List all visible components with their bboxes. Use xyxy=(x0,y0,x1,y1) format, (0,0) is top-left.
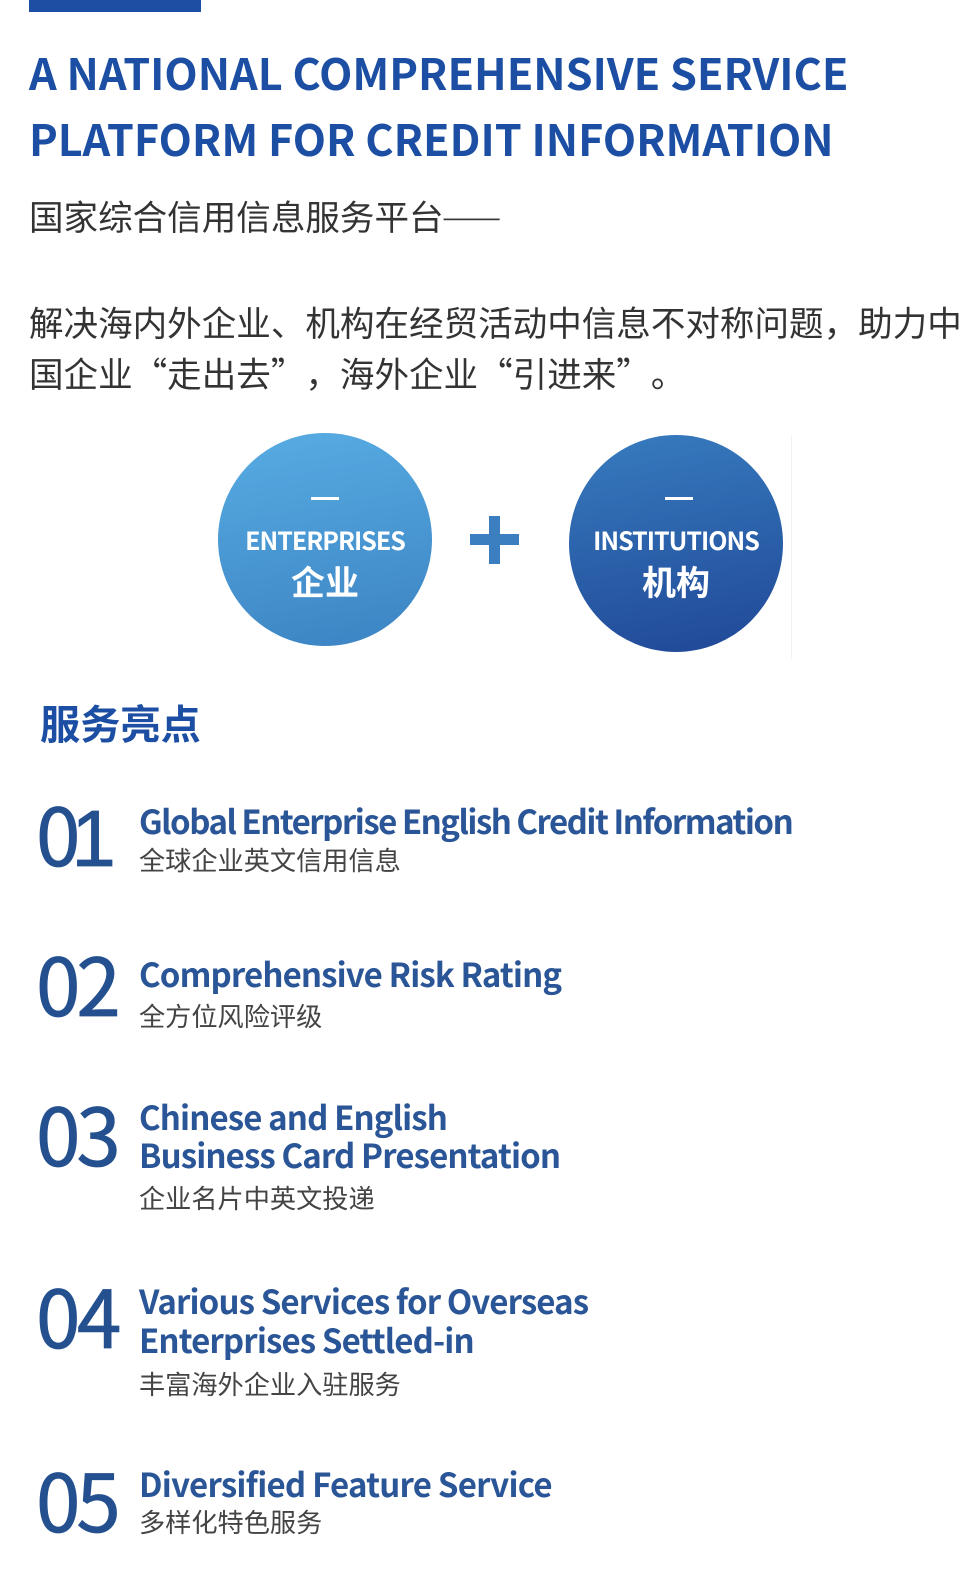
circle: enterprises xyxy=(218,433,432,646)
item 02 xyxy=(36,924,562,1040)
intro text: 国家综合信用信息服务平台—— xyxy=(29,190,502,240)
item 01: Global Enterprise English Credit Information xyxy=(139,796,792,844)
item 04: 丰富海外企业入驻服务 xyxy=(139,1364,401,1402)
circle: enterprises: 企业 xyxy=(291,556,359,605)
intro text: 解决海内外企业、机构在经贸活动中信息不对称问题，助力中 xyxy=(29,296,960,346)
circle: institutions: INSTITUTIONS xyxy=(593,522,759,558)
title xyxy=(28,41,848,169)
item 05 xyxy=(36,1440,552,1556)
item 05: 05 xyxy=(36,1440,117,1556)
intro text xyxy=(29,190,960,397)
circle: institutions xyxy=(569,435,783,652)
circle: enterprises: ENTERPRISES xyxy=(245,522,405,558)
item 01: 全球企业英文信用信息 xyxy=(139,840,401,878)
icon: plus xyxy=(470,516,519,564)
top accent bar xyxy=(29,0,201,12)
item 02: 02 xyxy=(36,924,117,1040)
item 03: Chinese and English xyxy=(139,1092,447,1140)
item 02: 全方位风险评级 xyxy=(139,996,322,1034)
item 04: Enterprises Settled-in xyxy=(139,1315,474,1363)
title: A NATIONAL COMPREHENSIVE SERVICE xyxy=(29,41,848,103)
title: PLATFORM FOR CREDIT INFORMATION xyxy=(29,107,834,169)
item 03: Business Card Presentation xyxy=(139,1130,560,1178)
item 03: 03 xyxy=(36,1074,117,1190)
item 03 xyxy=(36,1074,560,1216)
item 05: 多样化特色服务 xyxy=(139,1502,322,1540)
item 01: 01 xyxy=(36,774,112,890)
item 02: Comprehensive Risk Rating xyxy=(139,949,561,997)
item 04 xyxy=(36,1256,588,1402)
item 05: Diversified Feature Service xyxy=(139,1459,552,1507)
intro text: 国企业“走出去”，海外企业“引进来”。 xyxy=(29,347,685,397)
item 04: 04 xyxy=(36,1256,118,1372)
item 01 xyxy=(36,774,792,890)
item 04: Various Services for Overseas xyxy=(139,1276,588,1324)
item 03: 企业名片中英文投递 xyxy=(139,1178,375,1216)
section heading: 服务亮点 xyxy=(40,692,201,751)
circle: institutions: 机构 xyxy=(642,556,710,605)
